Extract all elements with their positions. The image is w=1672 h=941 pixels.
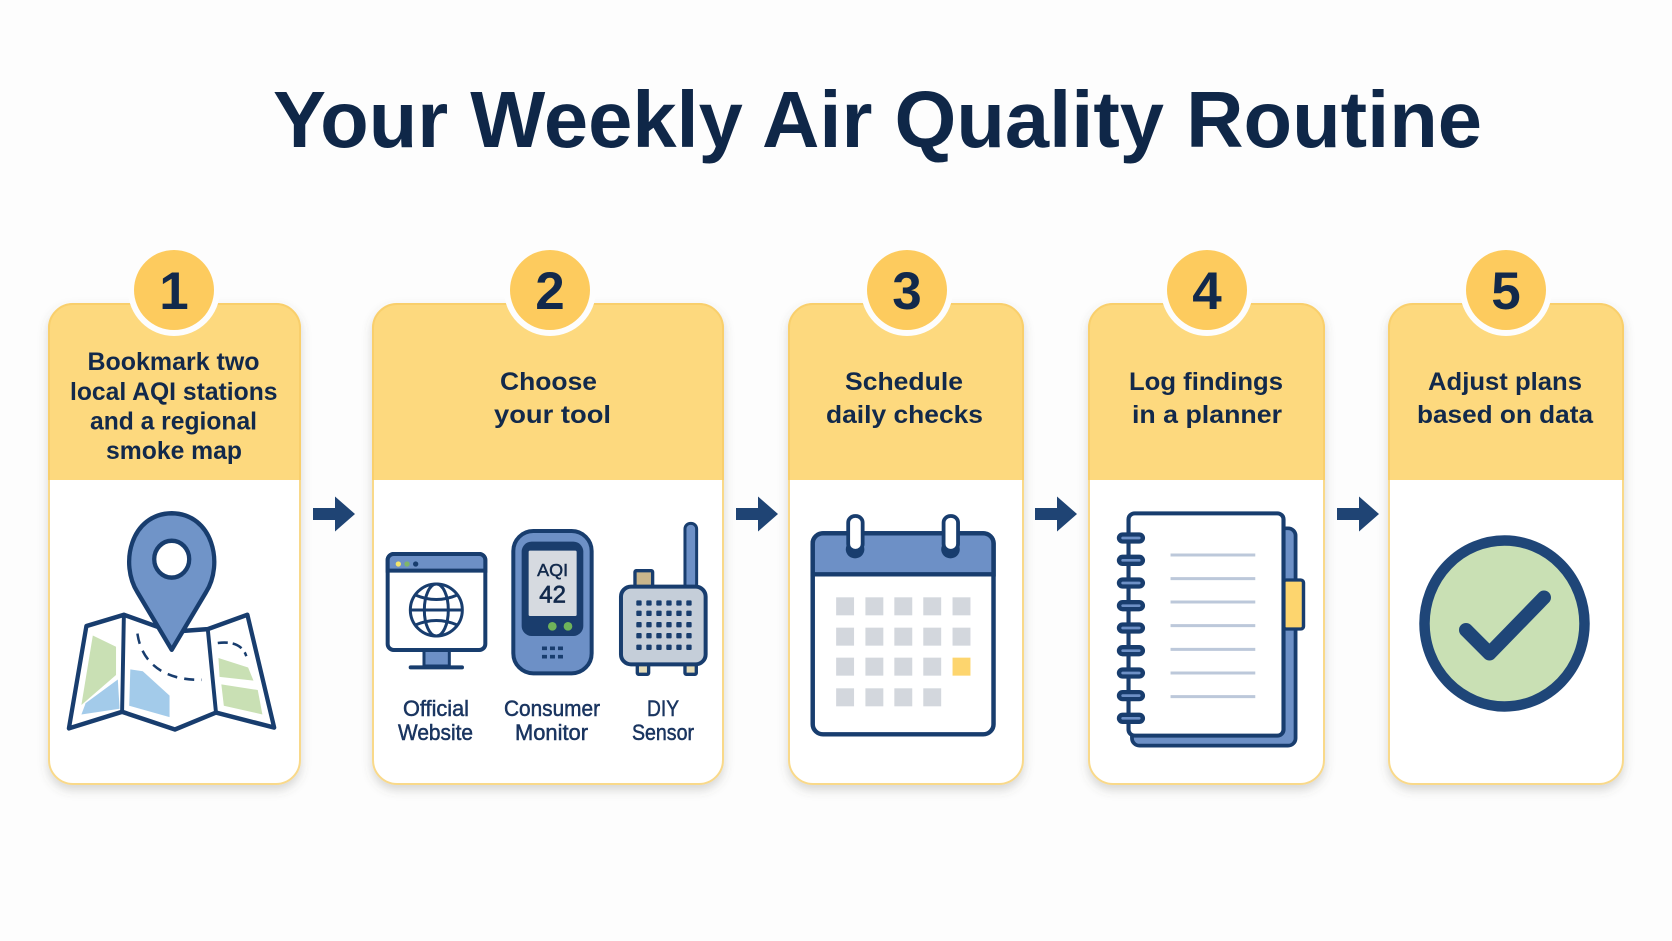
panel: step 3 [789, 244, 1023, 784]
step 3 heading: daily checks [826, 401, 983, 429]
step 2 header band [373, 304, 723, 480]
step 5 header band [1389, 304, 1623, 480]
panel: step 5 [1389, 244, 1623, 784]
step 4 heading: Log findings [1129, 368, 1283, 396]
step 3 number badge [861, 244, 953, 336]
step 4 header band [1089, 304, 1324, 480]
arrow 2 to 3 [736, 496, 778, 532]
step 3 number badge: 3 [892, 262, 922, 321]
step 3 header band [789, 304, 1023, 480]
title: Your Weekly Air Quality Routine [273, 75, 1482, 164]
step 5 heading: based on data [1417, 401, 1594, 429]
label: DIY sensor [632, 696, 694, 745]
step 4 heading [1129, 368, 1283, 429]
step 1 heading: smoke map [106, 437, 242, 465]
label: consumer monitor: Monitor [515, 720, 588, 745]
label: consumer monitor: Consumer [504, 696, 600, 721]
step 5 number badge [1460, 244, 1552, 336]
step 5 heading [1417, 368, 1594, 429]
step 3 heading: Schedule [845, 368, 963, 396]
icon: spiral planner [1123, 513, 1303, 746]
icon: check mark circle [1424, 540, 1584, 706]
arrow 4 to 5 [1337, 496, 1379, 532]
panel: step 1 [49, 244, 300, 784]
arrow 1 to 2 [313, 496, 355, 532]
step 5 number badge: 5 [1491, 262, 1521, 321]
step 4 number badge: 4 [1192, 262, 1222, 321]
step 2 number badge [504, 244, 596, 336]
panel: step 2 [373, 244, 723, 784]
step 2 heading: Choose [500, 368, 597, 396]
step 3 heading [826, 368, 983, 429]
step 4 number badge [1161, 244, 1253, 336]
step 1 heading: local AQI stations [70, 378, 278, 406]
label: DIY sensor: Sensor [632, 720, 694, 745]
step 1 heading: and a regional [90, 408, 257, 436]
arrow 3 to 4 [1035, 496, 1077, 532]
label: official website: Website [398, 720, 473, 745]
icon: consumer monitor: 42 [539, 581, 566, 608]
icon: consumer monitor: AQI [537, 560, 568, 580]
panel: step 4 [1089, 244, 1324, 784]
step 1 heading: Bookmark two [88, 348, 260, 376]
icon: consumer monitor [513, 531, 592, 673]
label: DIY sensor: DIY [647, 696, 679, 721]
icon: map with location pin [69, 513, 274, 729]
step 2 heading: your tool [494, 401, 611, 429]
icon: calendar [813, 516, 994, 734]
icon: DIY sensor [621, 523, 706, 674]
step 1 number badge: 1 [159, 262, 189, 321]
step 1 header band [49, 304, 300, 480]
step 1 number badge [128, 244, 220, 336]
step 4 heading: in a planner [1132, 401, 1282, 429]
icon: official website monitor [388, 554, 485, 667]
step 2 heading [494, 368, 611, 429]
label: consumer monitor [504, 696, 600, 745]
step 1 heading [70, 348, 278, 465]
label: official website [398, 696, 473, 745]
label: official website: Official [403, 696, 469, 721]
step 5 heading: Adjust plans [1428, 368, 1582, 396]
step 2 number badge: 2 [535, 262, 565, 321]
